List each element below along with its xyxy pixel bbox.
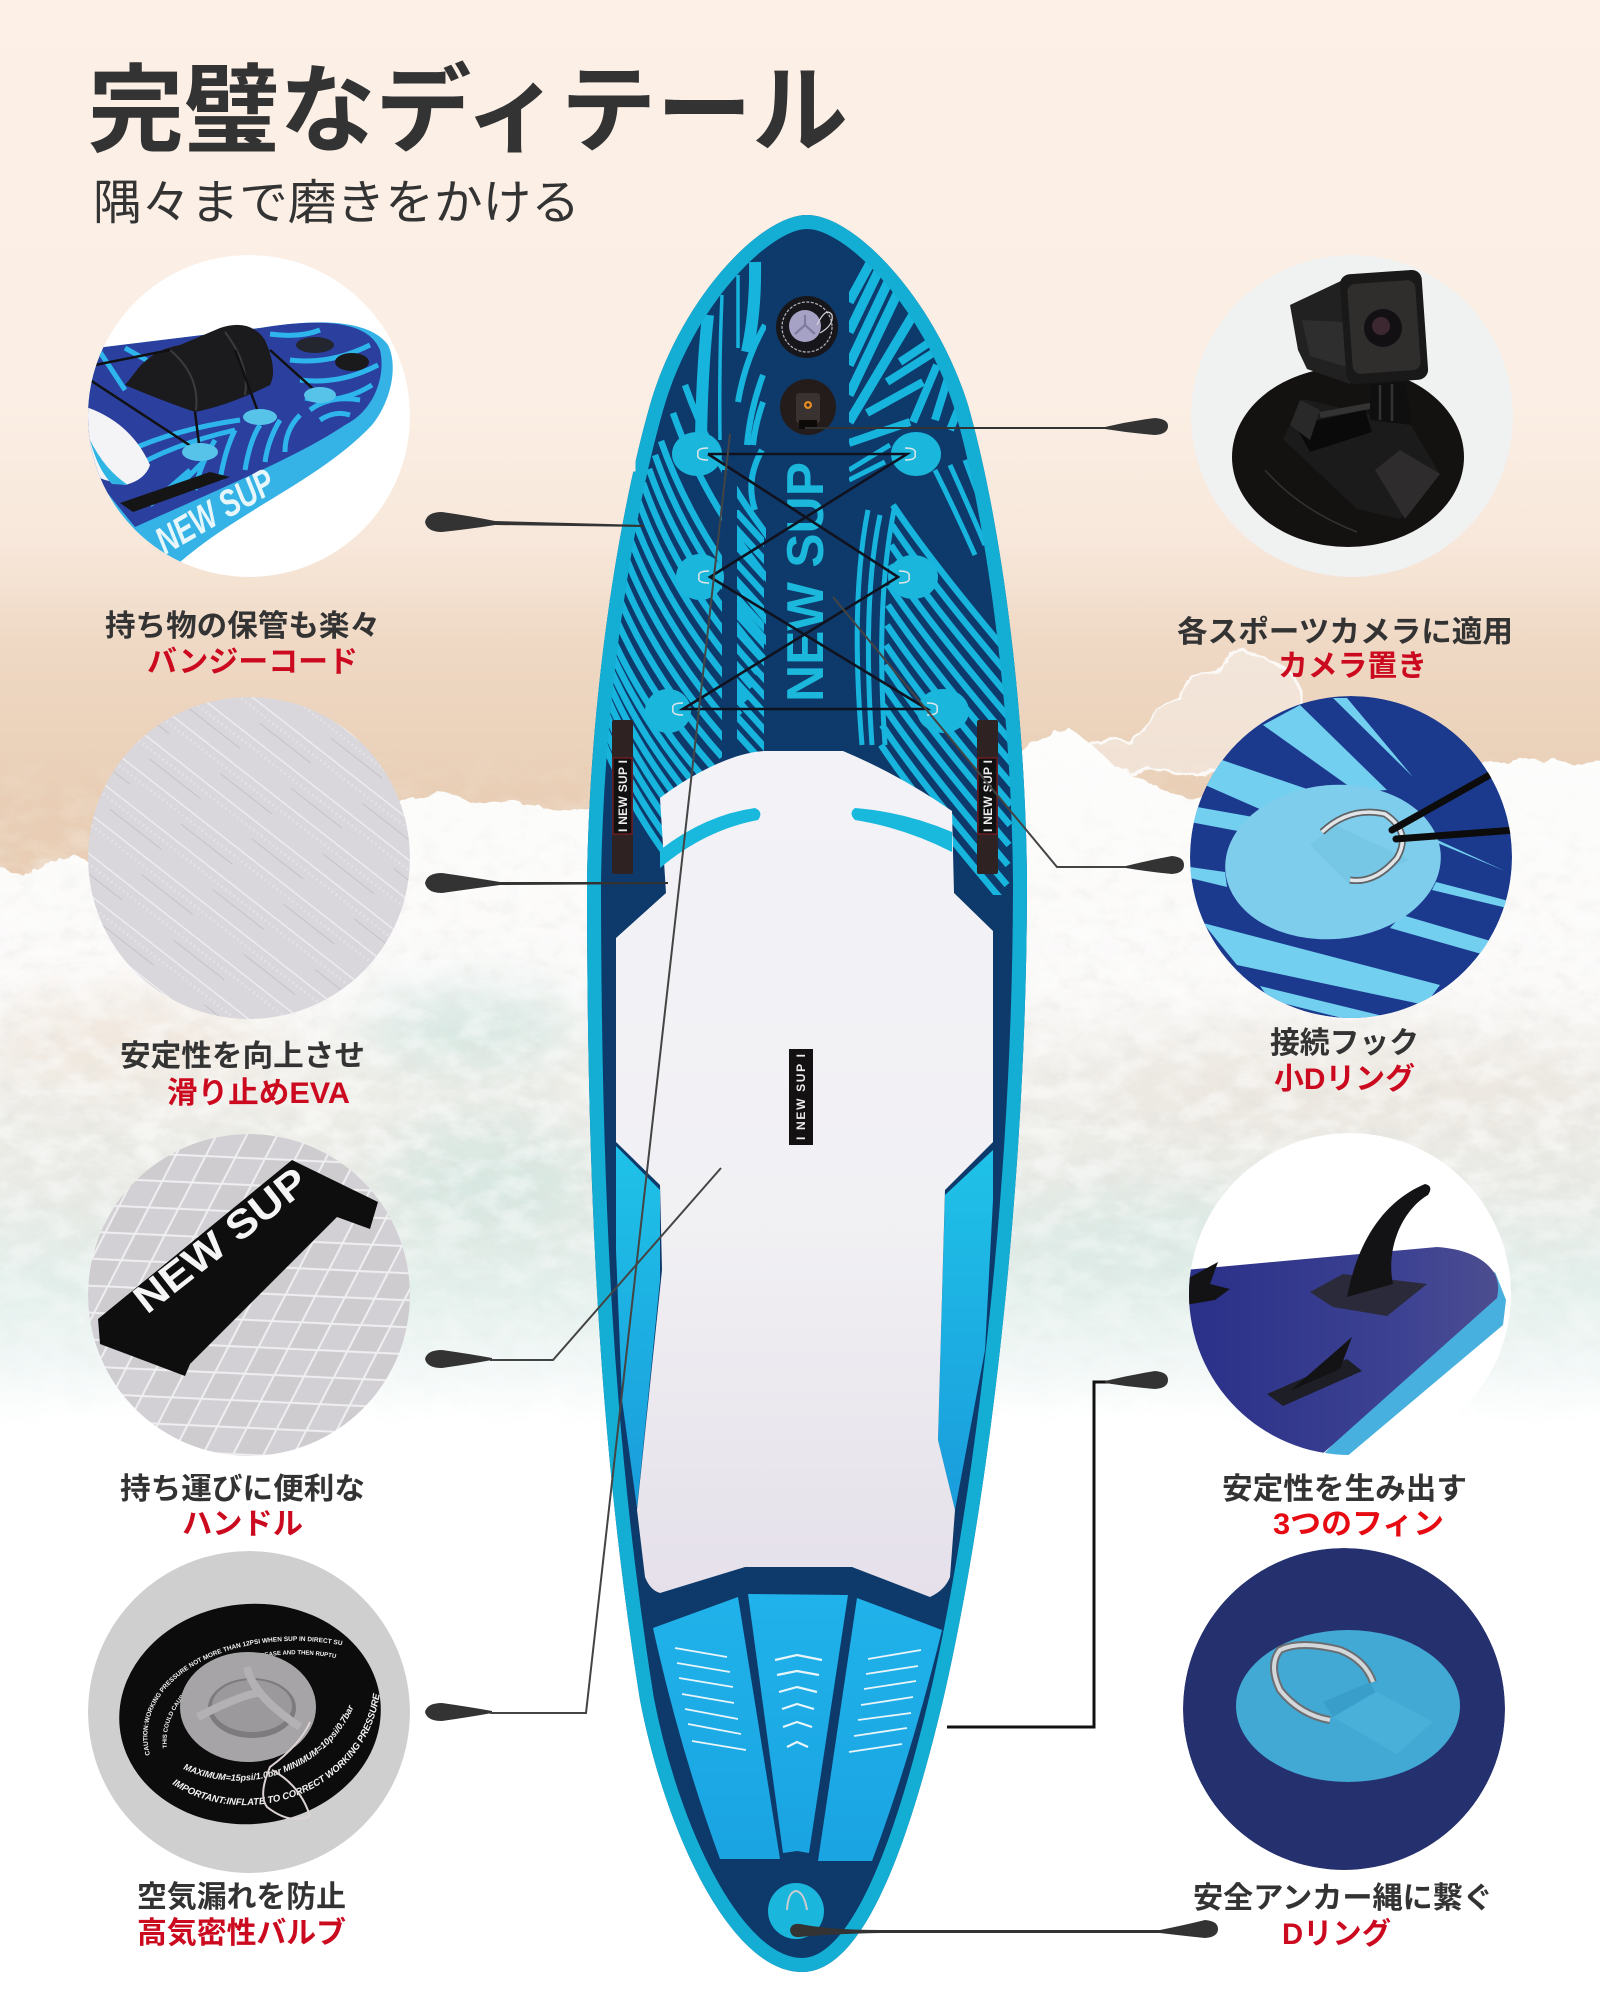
valve body <box>180 1652 316 1762</box>
label: non-slip EVA <box>120 1040 365 1110</box>
camera side <box>1290 280 1357 384</box>
white deck pad <box>616 751 993 1597</box>
patch <box>1236 1630 1460 1782</box>
pad swoosh right <box>852 808 952 852</box>
fin pads and fins <box>1310 1274 1427 1316</box>
panel: small D-ring photo <box>1190 696 1515 1020</box>
tail D-ring <box>768 1883 824 1939</box>
board rim <box>80 322 393 562</box>
panel: valve photo: IMPORTANT:INFLATE TO CORRECT WORKING PRESSURE <box>172 1692 380 1806</box>
board rim <box>1320 1272 1506 1458</box>
callout R3 leader <box>947 1371 1168 1727</box>
camera front <box>1339 269 1429 385</box>
board deck <box>80 323 382 527</box>
light stripes <box>1190 698 1509 1020</box>
cords <box>1392 772 1515 839</box>
label: valve: 高気密性バルブ <box>137 1916 346 1950</box>
mount base disc <box>1232 367 1464 547</box>
handle <box>120 472 230 512</box>
label: non-slip EVA: 滑り止めEVA <box>167 1077 350 1110</box>
D-ring loops <box>673 448 937 715</box>
D-ring <box>1274 1645 1373 1720</box>
label: valve <box>137 1881 346 1950</box>
label: small D-ring <box>1270 1027 1419 1096</box>
valve black disc <box>119 1604 381 1824</box>
label: small D-ring: 接続フック <box>1270 1027 1419 1060</box>
label: handle: 持ち運びに便利な <box>120 1473 365 1506</box>
callout L3 leader <box>425 1168 721 1368</box>
white pad corner <box>88 408 150 485</box>
panel: anchor D-ring photo <box>1183 1548 1505 1870</box>
traction pad grooves <box>675 1648 921 1752</box>
panel: valve photo: MAXIMUM=15psi/1.0bar MINIMUM=10psi/0.7bar <box>183 1704 353 1783</box>
panel: valve photo: CAUTION:WORKING PRESSURE NOT MORE THAN 12PSI WHEN SUP IN DIRECT SUNLIGHT <box>142 1636 342 1756</box>
callout L1 leader <box>425 512 644 532</box>
valve on deck <box>776 296 838 358</box>
dry bag <box>125 325 273 412</box>
tether <box>263 1722 310 1819</box>
label: bungee cord: 持ち物の保管も楽々 <box>105 610 380 643</box>
side fin panel left <box>616 1146 660 1508</box>
deck valve and mount <box>296 337 334 353</box>
pad swoosh left <box>660 808 760 868</box>
right carry handle <box>977 720 998 874</box>
board deck base <box>587 215 1027 1972</box>
leaf pattern <box>100 330 378 505</box>
deck palm-leaf pattern <box>595 258 1018 910</box>
surfboard <box>587 215 1027 1972</box>
label: fins <box>1222 1473 1467 1541</box>
traction pad right <box>818 1598 942 1861</box>
patch <box>1219 776 1447 948</box>
callout R1 leader <box>805 418 1168 435</box>
background: sand and ocean foam <box>0 0 1600 1395</box>
black handle <box>98 1160 378 1376</box>
panel: valve photo: THIS COULD CAUSE SUP PRESSURE SHARP INCREASE AND THEN RUPTURE <box>162 1650 336 1748</box>
rim lettering: NEW SUP <box>148 461 282 563</box>
board deck <box>1185 1247 1498 1456</box>
brand name on deck: NEW SUP <box>777 462 835 702</box>
label: valve: 空気漏れを防止 <box>137 1881 346 1914</box>
panel: handle photo: NEW SUP <box>125 1159 316 1322</box>
label: bungee cord <box>105 610 380 679</box>
D-ring <box>1322 812 1402 881</box>
label: fins: 安定性を生み出す <box>1222 1473 1467 1506</box>
board rim <box>587 215 1027 1972</box>
label: handle: ハンドル <box>182 1508 303 1541</box>
label: camera mount: 各スポーツカメラに適用 <box>1177 616 1513 649</box>
cords and rings <box>90 350 320 452</box>
label: bungee cord: バンジーコード <box>147 646 358 679</box>
label: anchor D-ring: 安全アンカー縄に繋ぐ <box>1193 1882 1493 1915</box>
centre carry handle <box>789 1049 813 1145</box>
panel: fins photo <box>1185 1133 1511 1458</box>
label: camera mount: カメラ置き <box>1278 650 1427 683</box>
panel: handle photo <box>88 1134 410 1456</box>
label: anchor D-ring: Dリング <box>1282 1918 1391 1951</box>
label: camera mount <box>1177 616 1513 683</box>
subtitle: 隅々まで磨きをかける <box>93 177 580 230</box>
panel: bungee cord photo <box>80 255 410 577</box>
camera mount on deck <box>780 379 836 435</box>
label: non-slip EVA: 安定性を向上させ <box>120 1040 365 1073</box>
right carry handle: I NEW SUP I <box>981 760 995 832</box>
traction pad left <box>653 1597 780 1859</box>
side fin panel right <box>938 1150 993 1510</box>
panel: camera mount photo <box>1191 255 1513 577</box>
label: anchor D-ring <box>1193 1882 1493 1951</box>
bungee D-ring patches <box>645 432 969 733</box>
label: small D-ring: 小Dリング <box>1274 1063 1415 1096</box>
callout R2 leader <box>833 597 1184 874</box>
mount block <box>1283 399 1440 519</box>
left carry handle: I NEW SUP I <box>616 760 630 832</box>
callout L4 leader <box>425 434 730 1721</box>
bungee cords <box>683 454 927 709</box>
label: fins: 3つのフィン <box>1273 1508 1444 1541</box>
left carry handle <box>612 720 633 874</box>
traction pad centre <box>748 1594 848 1853</box>
callout R4 leader <box>790 1920 1218 1938</box>
centre carry handle: I NEW SUP I <box>794 1054 808 1140</box>
label: handle <box>120 1473 365 1541</box>
panel: valve photo <box>88 1551 410 1873</box>
title: 完璧なディテール <box>88 58 848 165</box>
navy band beside centre column <box>722 470 737 760</box>
panel: non-slip EVA photo <box>88 697 410 1019</box>
callout L2 leader <box>425 873 668 893</box>
curved warning text <box>147 1641 340 1755</box>
